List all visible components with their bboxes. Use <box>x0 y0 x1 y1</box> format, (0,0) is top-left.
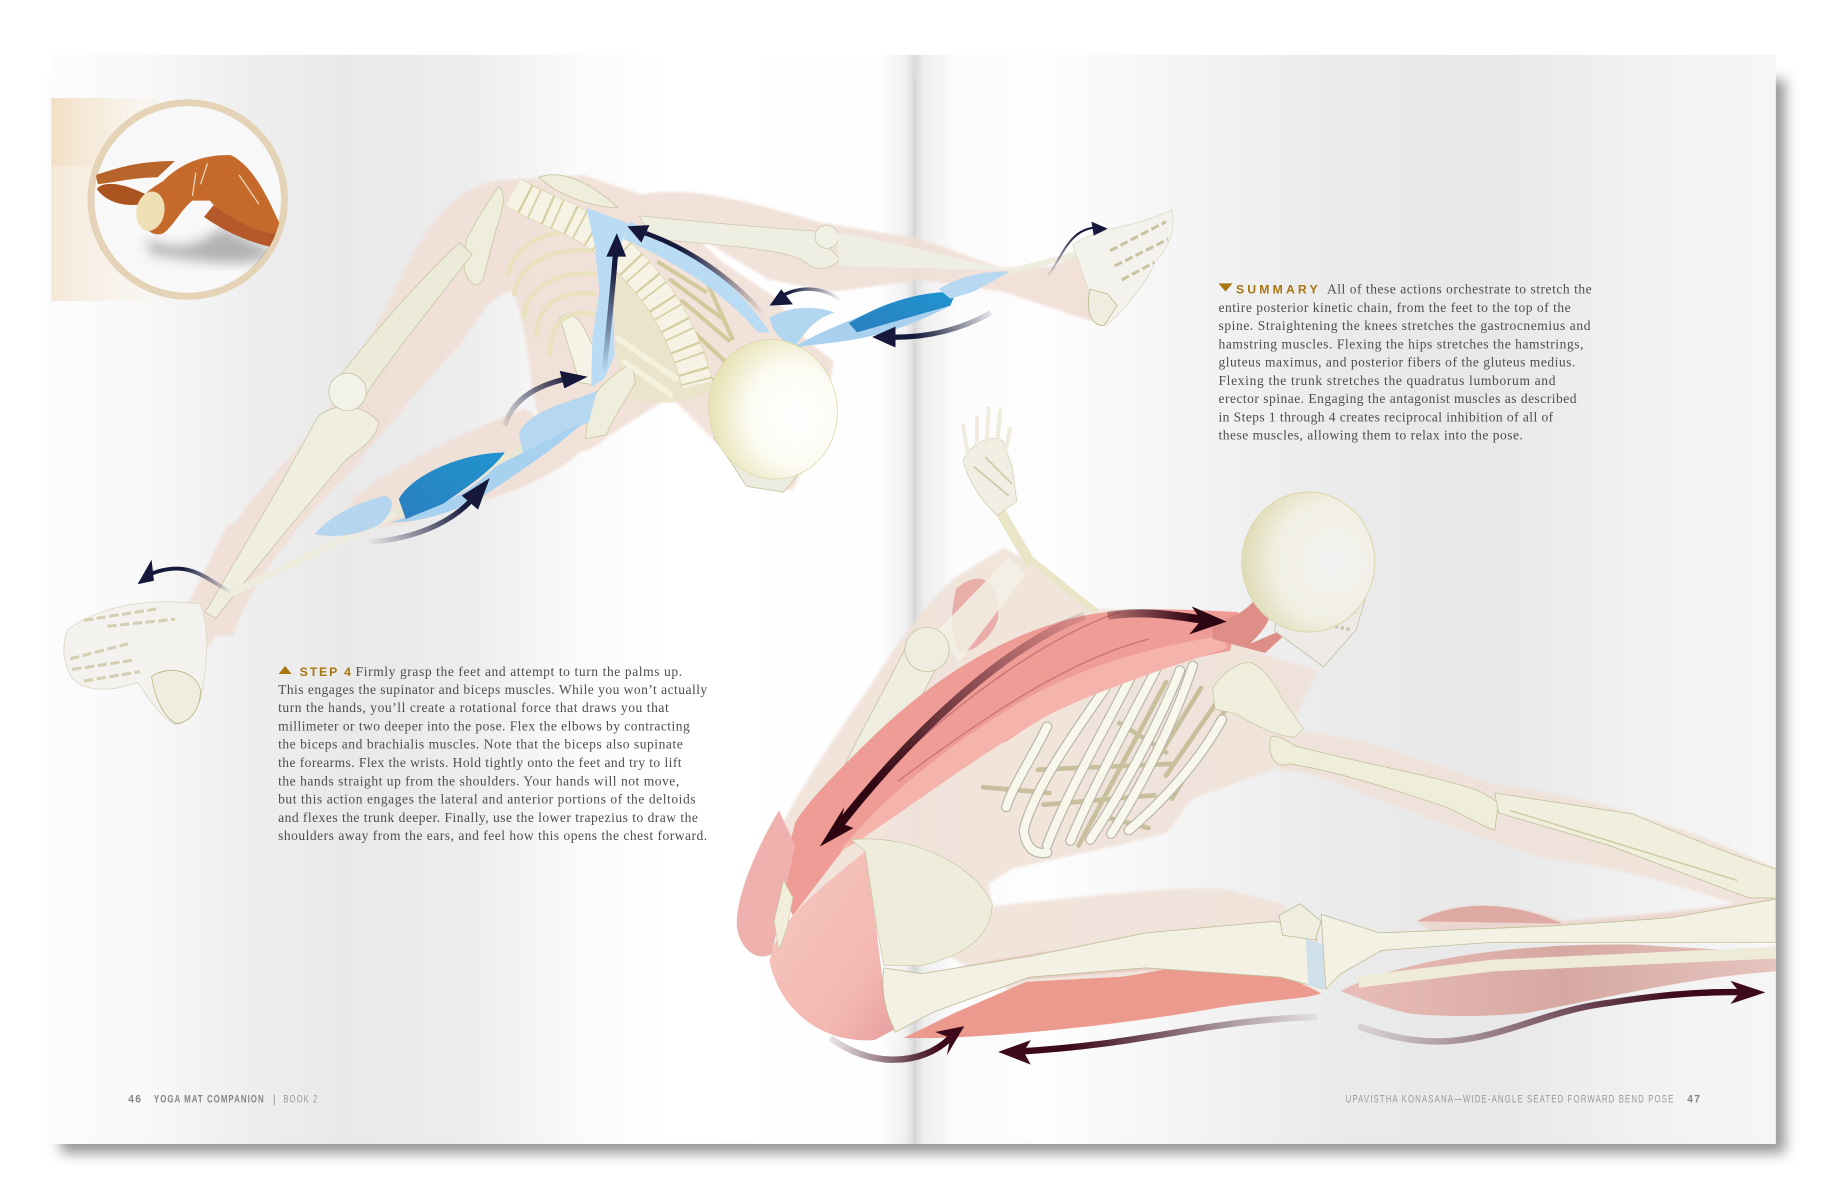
text block: step 4: This engages the supinator and biceps muscles. While you won’t actually <box>278 682 707 697</box>
figure: upper skeleton, step 4 <box>64 175 1173 724</box>
text block: summary: entire posterior kinetic chain, from the feet to the top of the <box>1218 300 1571 315</box>
muscle: neck <box>1212 602 1282 653</box>
muscles: blue biceps and deltoid, lower arm <box>315 391 597 536</box>
text block: summary: SUMMARY <box>1236 282 1318 296</box>
ribcage base <box>614 272 711 403</box>
arm bones: right lower figure <box>1270 737 1776 898</box>
text block: summary <box>1218 281 1592 443</box>
text block: step 4: the hands straight up from the shoulders. Your hands will not move, <box>278 773 679 788</box>
text block: step 4 <box>278 664 707 843</box>
silhouette: lower figure soft tissue <box>775 548 1776 1015</box>
text block: summary: spine. Straightening the knees stretches the gastrocnemius and <box>1218 318 1591 333</box>
inset: pose thumbnail <box>51 98 285 301</box>
text block: step 4: and flexes the trunk deeper. Finally, use the lower trapezius to draw the <box>278 810 698 825</box>
ribs: lower figure <box>983 666 1224 853</box>
silhouette: upper figure soft tissue <box>187 175 1108 665</box>
arrows: maroon figure actions <box>820 606 1765 1065</box>
footer: right folio: 47 <box>1687 1094 1701 1106</box>
scapula: lower figure <box>1213 662 1304 737</box>
text block: step 4: turn the hands, you’ll create a rotational force that draws you that <box>278 700 669 715</box>
muscle: hamstrings and calf <box>904 906 1776 1038</box>
sacrum <box>774 880 793 950</box>
book page: right <box>914 55 1776 1144</box>
muscle: erector spinae back <box>779 609 1238 915</box>
muscle: biceps <box>952 579 998 652</box>
text block: step 4: shoulders away from the ears, and feel how this opens the chest forward. <box>278 828 707 843</box>
text block: summary: in Steps 1 through 4 creates reciprocal inhibition of all of <box>1218 409 1554 424</box>
bones: upper-right limb <box>639 216 1090 272</box>
footer: right folio: UPAVISTHA KONASANA—WIDE-ANGLE SEATED FORWARD BEND POSE <box>1346 1094 1674 1106</box>
pelvis <box>851 839 992 966</box>
text block: step 4: STEP 4 <box>300 665 351 679</box>
upper limb bones and hand <box>844 406 1098 765</box>
text block: summary: hamstring muscles. Flexing the hips stretches the hamstrings, <box>1218 336 1583 351</box>
muscles: blue biceps and deltoid, upper arm <box>770 272 1010 348</box>
footer: left folio: BOOK 2 <box>283 1094 318 1106</box>
arrows: blue figure actions <box>138 222 1108 592</box>
text block: summary: these muscles, allowing them to relax into the pose. <box>1218 428 1523 443</box>
muscle: gluteals <box>737 810 900 1040</box>
shoulder and scapula bones <box>464 175 635 439</box>
text block: step 4: but this action engages the lateral and anterior portions of the deltoids <box>278 791 696 806</box>
foot: upper-right <box>1073 210 1173 325</box>
text block: summary: Flexing the trunk stretches the quadratus lumborum and <box>1218 373 1556 388</box>
footer: left folio: YOGA MAT COMPANION <box>154 1094 265 1106</box>
skull: upper figure <box>708 339 838 493</box>
ribs: upper figure <box>508 231 732 394</box>
foot: lower-left <box>64 602 207 724</box>
text block: summary: All of these actions orchestrate to stretch the <box>1327 281 1592 296</box>
footer: left folio: 46 <box>128 1094 142 1106</box>
text block: summary: gluteus maximus, and posterior fibers of the gluteus medius. <box>1218 355 1575 370</box>
text block: step 4: the forearms. Flex the wrists. Hold tightly onto the feet and try to lift <box>278 755 682 770</box>
text block: step 4: the biceps and brachialis muscles. Note that the biceps also supinate <box>278 737 683 752</box>
leg bones <box>883 899 1776 1032</box>
text block: step 4: millimeter or two deeper into the pose. Flex the elbows by contracting <box>278 718 690 733</box>
muscle: blue trapezius bands <box>587 208 770 387</box>
text block: step 4: Firmly grasp the feet and attempt to turn the palms up. <box>356 664 682 679</box>
bones: lower-left limb <box>204 242 473 618</box>
spine: upper figure <box>513 192 697 385</box>
skull: lower figure <box>1242 492 1375 667</box>
footer: left folio: | <box>273 1094 277 1106</box>
book page: left <box>51 55 914 1144</box>
text block: summary: erector spinae. Engaging the antagonist muscles as described <box>1218 391 1577 406</box>
figure: lower skeleton, summary <box>737 408 1776 1040</box>
